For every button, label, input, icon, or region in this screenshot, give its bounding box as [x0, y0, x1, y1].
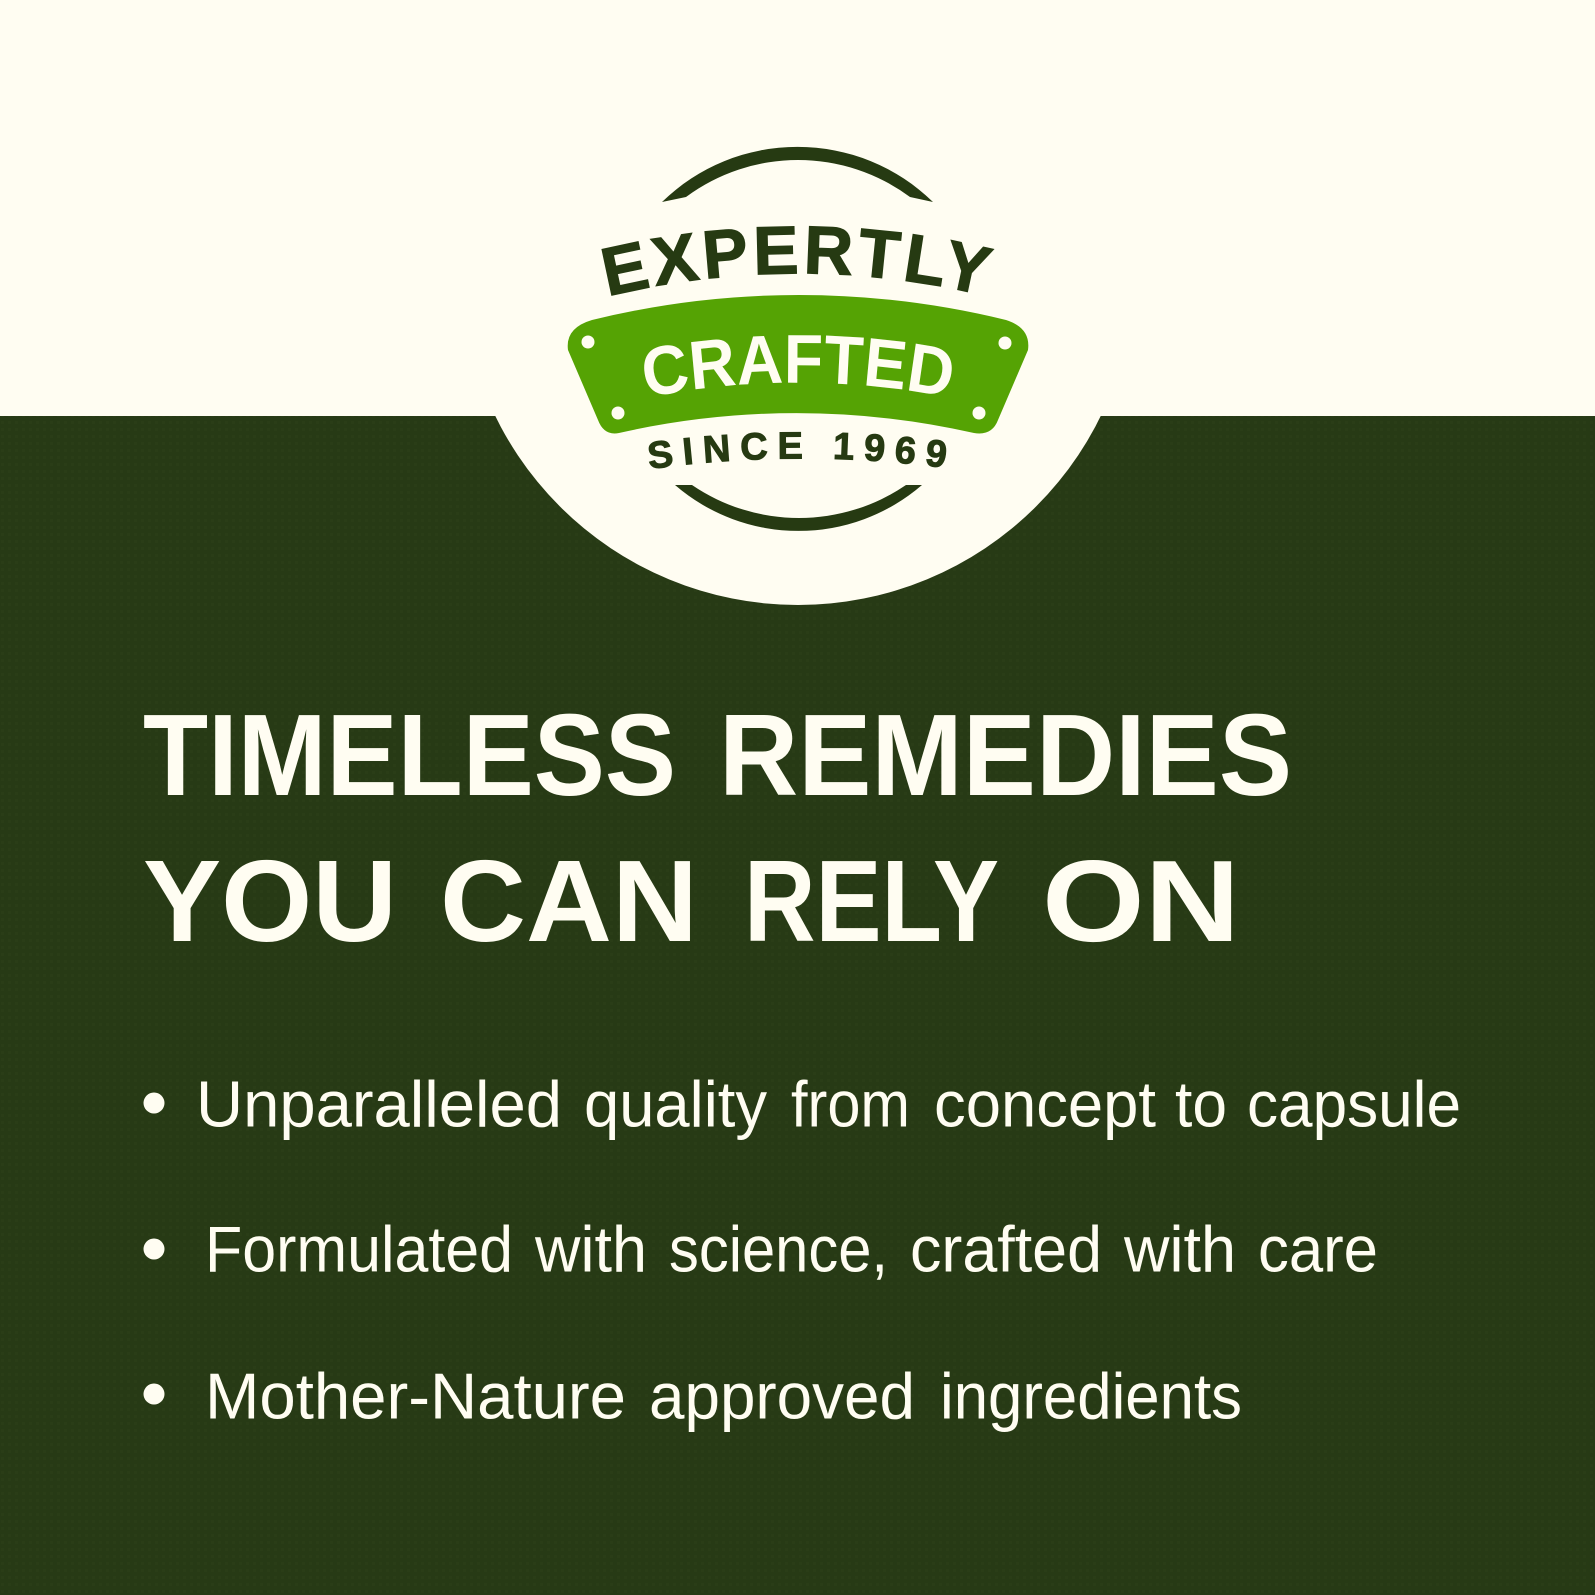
- bullet 2: science and care: science,: [669, 1212, 888, 1286]
- EXPERTLY curved text: EXPERTLY: [601, 226, 994, 296]
- bullet 2: science and care: [144, 1212, 1378, 1286]
- bullet 3: ingredients: Mother-Nature: [205, 1360, 626, 1432]
- heading: CAN: [440, 836, 698, 966]
- bullet 2: science and care: with: [1123, 1212, 1236, 1286]
- heading: ON: [1042, 836, 1240, 966]
- heading: TIMELESS: [143, 690, 676, 820]
- logo: Expertly Crafted Since 1969: [568, 146, 1028, 531]
- bullet 2: science and care: crafted: [910, 1212, 1102, 1286]
- CRAFTED curved text: CRAFTED: [644, 335, 952, 394]
- heading: RELY: [744, 836, 999, 966]
- heading: YOU: [143, 836, 397, 966]
- bullet 1: quality: capsule: [1247, 1068, 1461, 1140]
- bullet 3: ingredients: ingredients: [940, 1360, 1242, 1432]
- dark green textured panel: [0, 416, 1595, 1595]
- heading: REMEDIES: [719, 690, 1292, 820]
- bullet 1: quality: from: [791, 1068, 910, 1140]
- top arc: [662, 147, 933, 202]
- bullet 2: science and care: care: [1258, 1212, 1378, 1286]
- bottom arc: [675, 485, 922, 531]
- banner rivets: [582, 336, 1012, 420]
- SINCE 1969 curved text: SINCE 1969: [648, 432, 946, 468]
- green banner: [568, 295, 1028, 433]
- cream top band: [0, 0, 1595, 416]
- bullet list: [144, 1068, 1461, 1432]
- heading: [143, 690, 1292, 966]
- bullet 1: quality: quality: [584, 1068, 767, 1140]
- bullet 2: science and care: Formulated: [205, 1212, 513, 1286]
- cream semicircle behind logo: [461, 0, 1135, 605]
- bullet 2: science and care: with: [534, 1212, 647, 1286]
- bullet 3: ingredients: [144, 1360, 1242, 1432]
- bullet 1: quality: to: [1175, 1068, 1227, 1140]
- bullet 1: quality: Unparalleled: [196, 1068, 562, 1140]
- bullet 1: quality: concept: [934, 1068, 1156, 1140]
- bullet 3: ingredients: approved: [649, 1360, 915, 1432]
- bullet 1: quality: [144, 1068, 1461, 1140]
